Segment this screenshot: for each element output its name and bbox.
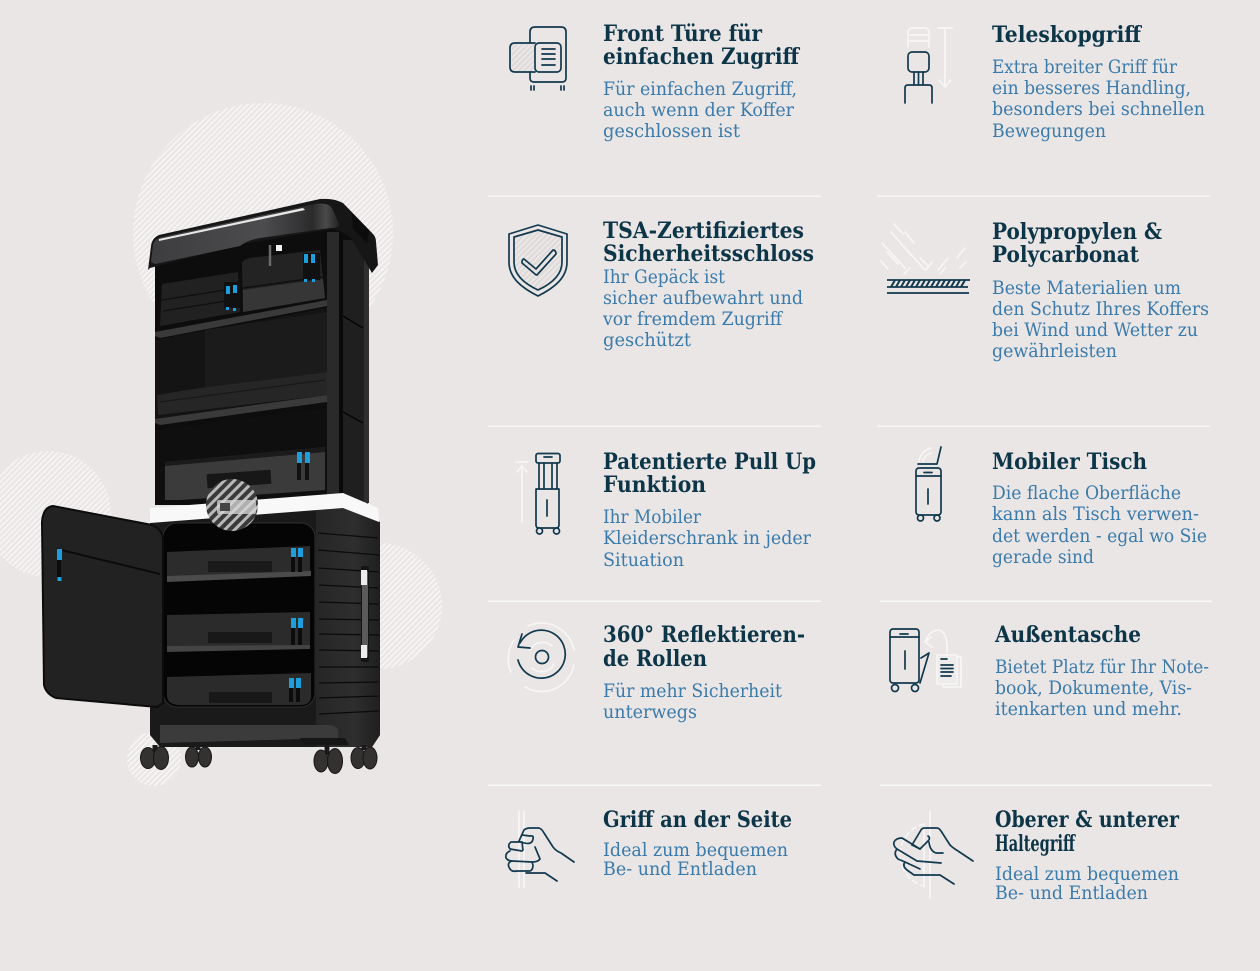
- body text: [603, 79, 797, 142]
- dividers: [488, 196, 1212, 786]
- body text: Ideal zum bequemen: [995, 864, 1179, 885]
- body text: [603, 840, 788, 880]
- suitcase illustration: [42, 199, 380, 774]
- packing cube: lower upper section: [165, 447, 325, 500]
- lower suitcase shell: [150, 507, 380, 747]
- body text: Ihr Gepäck ist: [603, 267, 726, 288]
- body text: Kleiderschrank in jeder: [603, 528, 811, 549]
- cube three: [167, 673, 311, 705]
- body text: [995, 657, 1209, 720]
- lock highlight circle: [206, 479, 258, 531]
- icon: rotating wheel: [508, 623, 574, 692]
- white band: [150, 493, 379, 523]
- heading: de Rollen: [603, 646, 707, 672]
- body text: Bietet Platz für Ihr Note-: [995, 657, 1209, 678]
- zipper on lid: [269, 245, 271, 266]
- body text: book, Dokumente, Vis-: [995, 678, 1192, 699]
- heading: Haltegriff: [995, 831, 1076, 857]
- heading: Polypropylen &: [992, 219, 1162, 245]
- decorative striped circles: [0, 103, 442, 786]
- body text: Die flache Oberfläche: [992, 483, 1181, 504]
- heading: 360° Reflektieren-: [603, 622, 805, 648]
- body text: Beste Materialien um: [992, 278, 1181, 299]
- heading: Mobiler Tisch: [992, 449, 1147, 475]
- panel: Front Türe: [510, 21, 801, 142]
- heading: Außentasche: [994, 622, 1141, 648]
- icon: telescopic handle: [905, 28, 952, 103]
- body text: kann als Tisch verwen-: [992, 504, 1199, 525]
- icon: front door: [510, 27, 566, 90]
- heading: [603, 449, 816, 498]
- body text: unterwegs: [603, 702, 697, 723]
- cube two: [167, 612, 310, 652]
- icon: suitcase table: [916, 447, 941, 521]
- body text: den Schutz Ihres Koffers: [992, 299, 1209, 320]
- heading: [995, 807, 1179, 857]
- heading: TSA-Zertifiziertes: [603, 218, 804, 244]
- shelf one: [155, 300, 327, 338]
- heading: Funktion: [603, 472, 706, 498]
- cube one: [167, 546, 311, 582]
- panel: TSA: [505, 218, 814, 351]
- heading: Oberer & unterer: [995, 807, 1179, 833]
- packing cube: top left: [160, 272, 240, 326]
- body text: Ihr Mobiler: [603, 507, 701, 528]
- body text: bei Wind und Wetter zu: [992, 320, 1198, 341]
- icon: pull up suitcase: [516, 454, 560, 534]
- body text: Bewegungen: [992, 121, 1106, 142]
- body text: sicher aufbewahrt und: [603, 288, 803, 309]
- body text: gewährleisten: [992, 341, 1117, 362]
- body text: auch wenn der Koffer: [603, 100, 794, 121]
- body text: besonders bei schnellen: [992, 99, 1205, 120]
- wheels: [140, 745, 377, 774]
- body text: [992, 57, 1205, 142]
- door opening with packing cubes: [163, 523, 315, 707]
- body text: [602, 267, 803, 351]
- heading: Griff an der Seite: [603, 807, 792, 833]
- heading: Front Türe für: [603, 21, 762, 47]
- packing cube: middle: [157, 372, 327, 415]
- heading: Sicherheitsschloss: [603, 241, 814, 267]
- icon: material layers: [881, 224, 970, 293]
- heading: [603, 21, 801, 70]
- body text: Situation: [603, 550, 684, 571]
- top lid: [148, 199, 378, 273]
- body text: Be- und Entladen: [603, 859, 757, 880]
- heading: Teleskopgriff: [992, 22, 1143, 48]
- body text: geschlossen ist: [603, 121, 741, 142]
- heading: Polycarbonat: [992, 242, 1140, 268]
- heading: [603, 622, 805, 672]
- body text: gerade sind: [992, 547, 1094, 568]
- body text: ein besseres Handling,: [992, 78, 1191, 99]
- panel: Mobiler Tisch: [916, 447, 1207, 568]
- side handle: [361, 566, 369, 662]
- body text: Für mehr Sicherheit: [603, 681, 783, 702]
- open door: [42, 506, 163, 707]
- icon: shield: [505, 225, 570, 297]
- packing cube: top right: [242, 250, 325, 312]
- heading: [992, 219, 1162, 268]
- upper wardrobe frame: [155, 226, 369, 505]
- heading: einfachen Zugriff: [603, 44, 801, 70]
- icon: hand on top handle: [894, 811, 973, 898]
- body text: itenkarten und mehr.: [995, 699, 1182, 720]
- heading: [603, 218, 814, 267]
- body text: [992, 278, 1209, 362]
- body text: [995, 864, 1179, 904]
- body text: [603, 681, 783, 723]
- shelf two: [155, 395, 327, 425]
- panel: Pull Up: [516, 449, 816, 571]
- panel: Polypropylen: [881, 219, 1209, 362]
- panel: Außentasche: [890, 622, 1209, 720]
- panel: Teleskopgriff: [905, 22, 1205, 142]
- body text: det werden - egal wo Sie: [992, 526, 1207, 547]
- body text: Extra breiter Griff für: [992, 57, 1177, 78]
- body text: vor fremdem Zugriff: [602, 309, 784, 330]
- body text: Für einfachen Zugriff,: [603, 79, 797, 100]
- body text: [992, 483, 1207, 568]
- icon: outer pocket: [890, 629, 961, 692]
- panel: Oberer und unterer Haltegriff: [894, 807, 1179, 904]
- panel: 360 Rollen: [508, 622, 805, 723]
- panel: Griff an der Seite: [506, 807, 792, 887]
- body text: [603, 507, 811, 571]
- body text: Be- und Entladen: [995, 883, 1148, 904]
- body text: geschützt: [603, 330, 692, 351]
- heading: Patentierte Pull Up: [603, 449, 816, 475]
- body text: Ideal zum bequemen: [603, 840, 788, 861]
- icon: hand on side handle: [506, 811, 574, 887]
